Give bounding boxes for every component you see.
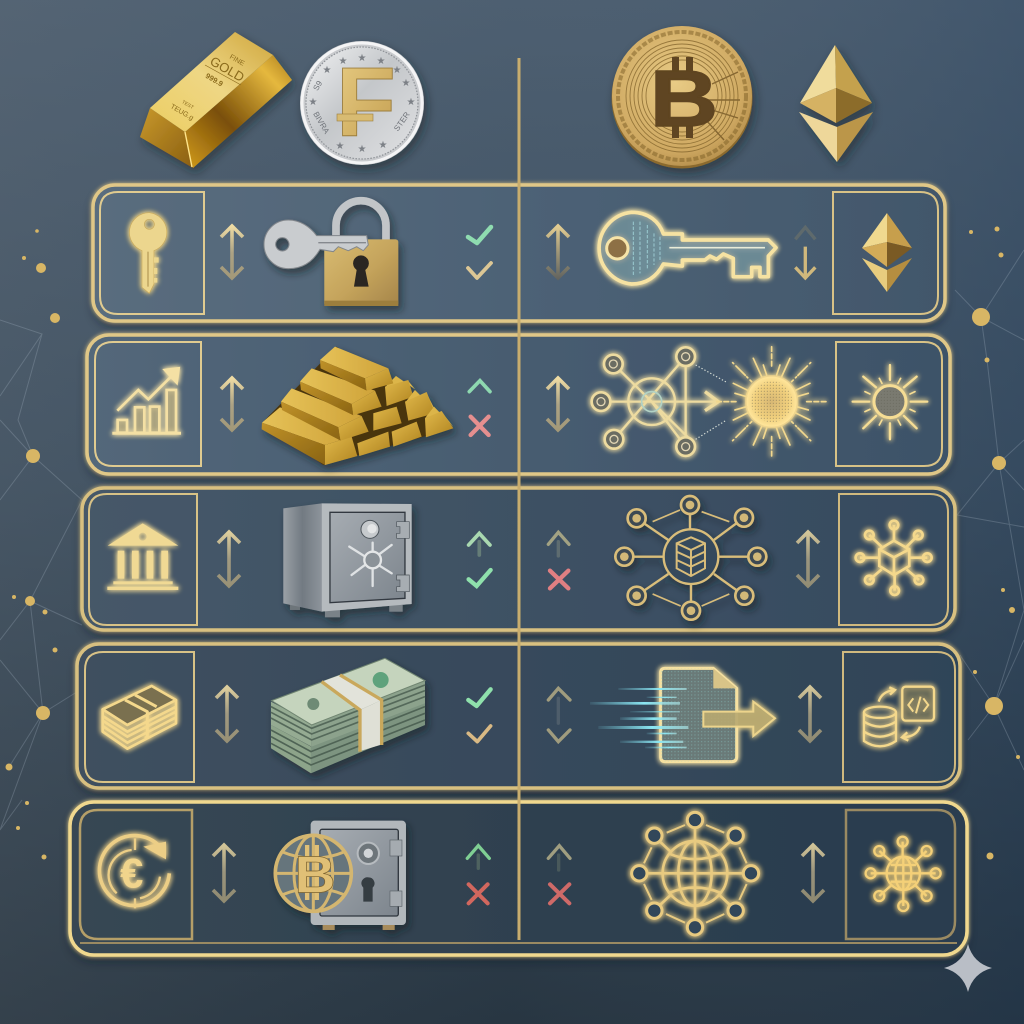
chevron and cross crypto xyxy=(548,846,570,903)
chevron and check xyxy=(469,533,491,586)
right icon box xyxy=(836,342,942,466)
icon: gold bar: TEST xyxy=(180,99,195,111)
icon: small global network xyxy=(866,837,941,911)
left icon box xyxy=(80,810,192,939)
right icon box xyxy=(833,192,938,314)
right icon box xyxy=(846,810,955,939)
panel: row 3 custody xyxy=(82,488,955,630)
icon: silver franc coin: ★ xyxy=(377,56,386,67)
icon: silver franc coin: ★ xyxy=(407,97,416,108)
icon: gold bar: TEUG.g xyxy=(169,103,195,122)
icon: gold key xyxy=(129,213,167,293)
arrow: up down xyxy=(218,532,240,586)
left icon box xyxy=(100,192,204,314)
icon: gold bar pyramid xyxy=(262,347,453,465)
icon: digital key xyxy=(599,212,776,284)
icon: sparkle watermark xyxy=(944,944,992,992)
chevrons up down xyxy=(548,688,570,742)
icon: bitcoin globe and safe xyxy=(275,821,406,930)
icon: block network xyxy=(856,521,932,595)
panel: row 4 cash and smart contracts xyxy=(77,644,960,788)
icon: bitcoin globe and safe: B xyxy=(294,846,335,904)
icon: silver franc coin: ★ xyxy=(402,78,411,89)
right icon box xyxy=(839,494,948,625)
panel shadows xyxy=(70,191,967,961)
icon: silver key and padlock xyxy=(264,201,398,306)
arrow: up down xyxy=(221,226,243,278)
icon: steel safe xyxy=(283,503,412,617)
icon: silver franc coin: ★ xyxy=(358,144,367,155)
check marks xyxy=(468,689,491,742)
icon: validator network to sun xyxy=(592,347,827,457)
icon: gold bar: 999.9 xyxy=(204,71,225,88)
icon: silver franc coin: STER xyxy=(392,110,412,133)
icon: growth chart xyxy=(112,368,181,433)
chevron and cross xyxy=(469,381,490,435)
icon: silver franc coin: ★ xyxy=(358,53,367,64)
icon: gold bar: GOLD xyxy=(208,53,247,85)
icon: silver franc coin: F xyxy=(336,47,396,157)
icon: silver franc coin: ★ xyxy=(339,56,348,67)
icon: silver franc coin: BIVRA xyxy=(311,110,331,136)
icon: global network xyxy=(632,812,759,935)
icon: gold bar xyxy=(140,32,292,168)
icon: bitcoin coin: B xyxy=(650,54,718,143)
icon: database and code xyxy=(864,687,934,746)
decorative network left xyxy=(0,229,82,859)
arrow: up down crypto xyxy=(802,845,824,901)
arrow: up down xyxy=(221,378,243,430)
icon: silver franc coin: ★ xyxy=(379,140,388,151)
icon: cash stack line xyxy=(103,686,176,749)
arrow: up down xyxy=(216,687,238,741)
icon: small sun xyxy=(853,365,927,439)
icon: gold bar: FINE xyxy=(228,54,246,68)
icon: silver franc coin: ★ xyxy=(323,65,332,76)
icon: silver franc coin: ★ xyxy=(309,97,318,108)
back right small bars xyxy=(357,376,453,456)
chevron and cross crypto xyxy=(548,532,569,588)
arrow: up down crypto xyxy=(547,378,569,430)
icon: silver franc coin: S9 xyxy=(311,79,324,92)
icon: smart contract document xyxy=(590,668,775,762)
left icon box xyxy=(89,494,197,625)
icon: ethereum small xyxy=(862,213,912,292)
panel: row 5 global access xyxy=(70,802,967,955)
decorative network right xyxy=(955,226,1024,860)
icon: silver franc coin: ★ xyxy=(393,65,402,76)
icon: bank building xyxy=(107,523,178,590)
chevron and cross xyxy=(467,846,489,903)
arrow: down emphasised xyxy=(795,227,815,278)
icon: banknote stack xyxy=(271,658,425,773)
icon: silver franc coin xyxy=(300,41,424,165)
icon: euro circular: € xyxy=(120,849,143,896)
arrow: up down xyxy=(213,845,235,901)
panel: row 1 private keys xyxy=(93,185,945,321)
left icon box xyxy=(95,342,201,466)
arrow: up down crypto xyxy=(799,687,821,741)
right icon box xyxy=(843,652,955,782)
icon: silver franc coin: ★ xyxy=(336,141,345,152)
check marks xyxy=(468,227,491,278)
icon: node network with ledger xyxy=(615,496,766,620)
left icon box xyxy=(85,652,194,782)
icon: bitcoin coin xyxy=(612,26,752,168)
center divider xyxy=(518,58,520,940)
panel: row 2 supply and scarcity xyxy=(87,335,950,474)
arrow: up down crypto xyxy=(797,532,819,586)
icon: ethereum diamond xyxy=(799,45,873,162)
arrow: up down crypto xyxy=(547,226,569,278)
